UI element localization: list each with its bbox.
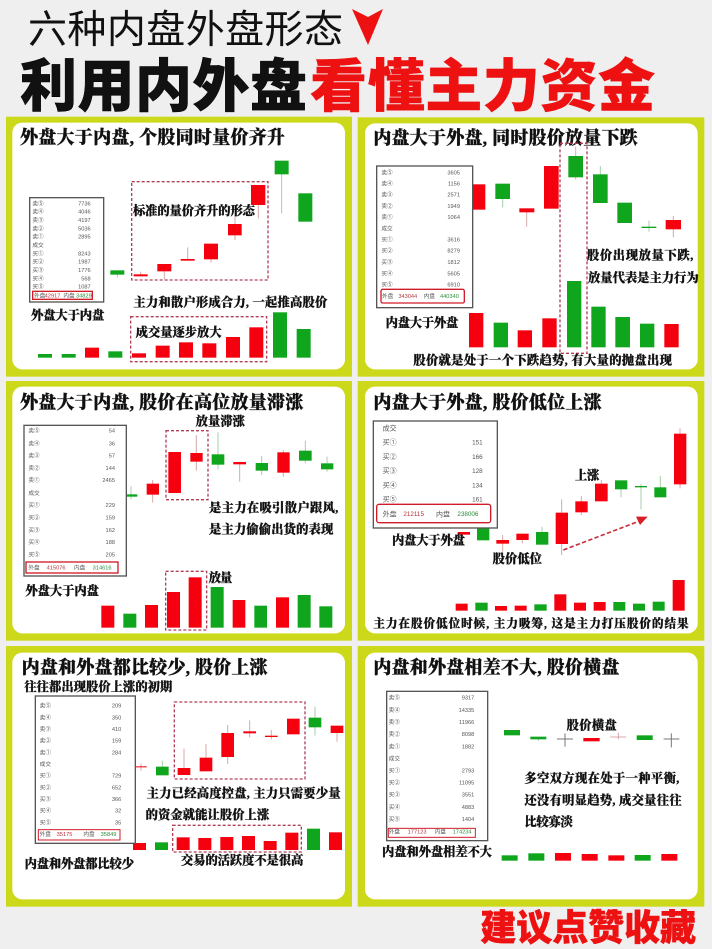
panel 5 order book table <box>35 696 135 843</box>
panel 5 volume highlight box <box>173 825 301 852</box>
panel 1 volume highlight box <box>131 317 267 362</box>
panel 1 order book table: 568 <box>81 276 91 282</box>
panel 6 order book table: 1404 <box>462 817 474 823</box>
panel 4 order book table: 166 <box>472 454 483 461</box>
panel 1 order book table: 42917 <box>45 293 60 299</box>
panel 3 order book table: 卖⑤ <box>28 427 40 435</box>
panel 6 annotation: 股价横盘: 股价横盘 <box>567 718 617 733</box>
panel 6 heading: 内盘和外盘相差不大, 股价横盘 <box>373 657 619 678</box>
panel 2 order book table: 2571 <box>447 193 460 199</box>
panel 6 order book table: 3551 <box>462 793 474 799</box>
panel 3 volume bars <box>101 577 332 628</box>
panel 3 volume highlight box <box>166 571 207 630</box>
panel 4 order book table: 成交 <box>383 423 397 432</box>
panel 2 table caption: 内盘大于外盘 <box>386 315 459 330</box>
panel 3 order book table: 卖① <box>28 476 40 484</box>
panel 1 order book table: 卖② <box>32 224 44 232</box>
panel 2 order book table: 1949 <box>447 204 460 210</box>
panel 2 order book table: 卖③ <box>381 191 393 199</box>
panel 2 order book table: 内盘 <box>424 292 435 300</box>
panel 1 price highlight box <box>132 182 268 280</box>
title line 2: 看懂主力资金 <box>310 55 655 119</box>
panel 6 order book table: 外盘 <box>389 827 400 835</box>
panel 4 order book table: 128 <box>472 468 483 475</box>
panel 5 order book table: 350 <box>112 715 121 721</box>
panel 2 order book table: 5605 <box>447 271 460 277</box>
panel 6 order book table: 买④ <box>389 803 400 811</box>
panel 6 order book table: 11966 <box>459 720 474 726</box>
panel 5 order book table: 卖④ <box>40 713 51 721</box>
panel 1 order book table: 4046 <box>78 210 91 216</box>
panel 1 order book table: 4197 <box>78 218 91 224</box>
panel 5 order book table: 159 <box>112 739 121 745</box>
panel 3 order book table: 57 <box>109 454 115 460</box>
panel 4 order book table: 151 <box>472 440 483 447</box>
panel 3 order book table: 415076 <box>47 565 66 571</box>
panel 6 candlestick chart <box>504 730 679 747</box>
panel 3 order book table: 卖② <box>28 464 40 472</box>
panel 3 order book table: 2465 <box>102 478 115 484</box>
panel 5 order book table: 652 <box>112 785 121 791</box>
panel 2 order book table <box>377 166 473 308</box>
panel 5 order book table: 买④ <box>40 807 51 815</box>
panel 5 annotation: 高度控盘 <box>146 786 341 822</box>
panel 1 order book table: 34829 <box>76 293 92 299</box>
panel 5 order book table: 卖③ <box>40 725 51 733</box>
panel 3 order book table: 外盘 <box>28 563 40 571</box>
panel 1 order book table: 成交 <box>32 241 44 249</box>
panel 1 volume bars <box>38 312 311 358</box>
panel 3 order book table: 205 <box>106 552 115 558</box>
panel 1 table caption: 外盘大于内盘 <box>31 307 105 322</box>
panel 5 candlestick chart <box>135 707 343 775</box>
panel 3 order book table: 买⑤ <box>28 550 40 558</box>
panel 1 order book table: 7736 <box>78 201 91 207</box>
panel 3: 外盘大于内盘 高位放量滞涨 <box>6 381 352 641</box>
panel 2 order book table: 1156 <box>448 181 460 187</box>
panel 1 order book table: 买② <box>32 258 44 266</box>
panel 6 order book table: 卖⑤ <box>389 694 400 702</box>
panel 4 annotation: 上涨: 上涨 <box>575 467 600 482</box>
panel 2 order book table: 买④ <box>381 269 393 277</box>
panel 6 annotation: 平衡: 多空双方现在处于一种平衡, <box>524 771 679 786</box>
title line 2: 利用内外盘 <box>20 55 307 119</box>
panel 1 order book table: 外盘 <box>34 291 46 299</box>
panel 3 order book table: 买③ <box>28 526 40 534</box>
panel 1 order book table: 内盘 <box>63 291 75 299</box>
panel 5 annotation: 活跃度: 交易的活跃度不是很高 <box>181 852 303 867</box>
panel 1 order book table: 1087 <box>78 285 91 291</box>
panel 2 order book table: 343044 <box>398 294 417 300</box>
panel 3 order book table: 买① <box>28 501 40 509</box>
panel 3 order book table: 成交 <box>28 489 40 497</box>
panel 2 highlight box <box>560 143 587 353</box>
panel 5 order book table: 35175 <box>57 832 72 838</box>
panel 1 annotation: 标准形态: 标准的量价齐升的形态 <box>133 203 257 218</box>
panel 1 order book table: 卖④ <box>32 208 44 216</box>
panel 6 order book table: 卖① <box>389 742 400 750</box>
panel 6 table caption: 内盘和外盘相差不大 <box>382 844 493 859</box>
panel 5 order book table: 内盘 <box>83 830 95 838</box>
panel 1 order book table: 卖⑤ <box>32 199 44 207</box>
panel 5 order book table: 买② <box>40 783 51 791</box>
panel 5 order book table: 卖① <box>40 748 51 756</box>
panel 3 price highlight box <box>166 431 208 500</box>
panel 1 annotation: 合力: 主力和散户形成合力, 一起推高股价 <box>133 295 328 310</box>
panel 5 table caption: 内盘和外盘都比较少 <box>25 856 136 871</box>
panel 3 order book table: 314616 <box>93 565 112 571</box>
panel 1 order book table <box>30 198 104 302</box>
panel 3 order book table <box>24 425 126 576</box>
panel 2 order book table: 3605 <box>447 170 460 176</box>
panel 4 order book table: 内盘 <box>436 509 450 518</box>
title line 1: 六种内盘外盘形态 <box>28 9 343 52</box>
panel 5 price highlight box <box>174 702 305 779</box>
panel 4 order book table: 212115 <box>403 511 424 518</box>
panel 1: 外盘大于内盘 量价齐升 <box>6 117 352 377</box>
panel 3 table caption: 外盘大于内盘 <box>25 583 100 598</box>
panel 3 order book table: 54 <box>109 429 115 435</box>
panel 6 order book table: 卖④ <box>389 706 400 714</box>
panel 2 annotation: 放量下跌: 股价出现放量下跌, <box>587 247 693 262</box>
panel 3 order book table: 买④ <box>28 538 40 546</box>
panel 4 bottom note: 主力在股价低位时候, 主力吸筹, 这是主力打压股价的结果 <box>373 616 689 630</box>
panel 3 order book table: 卖④ <box>28 439 40 447</box>
panel 5: 内盘外盘都少 股价上涨 <box>6 646 352 907</box>
panel 5 order book table: 729 <box>112 774 121 780</box>
panel 1 order book table: 买④ <box>32 274 44 282</box>
panel 2 order book table: 卖⑤ <box>381 168 393 176</box>
panel 3 candlestick chart <box>125 432 333 503</box>
panel 3 order book table: 内盘 <box>74 563 86 571</box>
panel 4 candlestick chart <box>458 428 686 555</box>
panel 6 order book table: 174234 <box>453 829 472 835</box>
panel 4 order book table <box>373 421 497 528</box>
panel 2 order book table: 买③ <box>381 258 393 266</box>
panel 4 volume bars <box>456 580 685 611</box>
panel 4: 内盘大于外盘 低位上涨 <box>358 381 704 641</box>
panel 4 order book table: 134 <box>472 482 483 489</box>
panel 4 order book table: 买④ <box>383 481 397 489</box>
panel 4 order book table: 161 <box>472 496 483 503</box>
panel 5 order book table: 外盘 <box>40 830 51 838</box>
panel 2 order book table: 买② <box>381 247 393 255</box>
panel 1 order book table: 买⑤ <box>32 283 44 291</box>
panel 2: 内盘大于外盘 放量下跌 <box>358 117 704 377</box>
panel 1 order book table: 5036 <box>78 226 91 232</box>
panel 6 order book table: 9317 <box>462 696 474 702</box>
panel 2 order book table: 买⑤ <box>381 280 393 288</box>
panel 2 bottom note: 股价就是处于一个下跌趋势, 有大量的抛盘出现 <box>413 352 673 367</box>
panel 6 order book table: 买③ <box>389 791 400 799</box>
panel 2 annotation: 放量下跌 <box>587 247 699 285</box>
panel 3 annotation: 吸引散户: 是主力偷偷出货的表现 <box>209 522 334 537</box>
panel 2 order book table: 3616 <box>447 237 460 243</box>
panel 4 annotation: 股价低位: 股价低位 <box>493 551 543 566</box>
panel 2 order book table: 卖② <box>381 202 393 210</box>
panel 1 candlestick chart <box>110 161 312 279</box>
panel 6 order book table: 卖③ <box>389 718 400 726</box>
panel 6 order book table: 买② <box>389 779 400 787</box>
panel 1 order book table: 卖③ <box>32 216 44 224</box>
panel 5 order book table: 卖② <box>40 737 51 745</box>
panel 2 order book table: 440340 <box>440 294 459 300</box>
panel 1 order book table: 1987 <box>78 260 91 266</box>
panel 2 volume bars <box>469 281 679 347</box>
panel 6 order book table: 成交 <box>389 754 400 762</box>
panel 4 order book table: 买③ <box>383 467 397 475</box>
panel 2 order book table: 外盘 <box>382 292 394 300</box>
panel 4 order book table: 买② <box>383 453 397 461</box>
panel 2 annotation: 放量下跌: 放量代表是主力行为 <box>588 270 699 285</box>
panel 1 order book table: 买① <box>32 249 44 257</box>
panel 6 order book table: 4883 <box>462 805 474 811</box>
panel 3 order book table: 159 <box>106 515 115 521</box>
panel 2 order book table: 买① <box>381 235 393 243</box>
panel 3 order book table: 188 <box>106 540 115 546</box>
panel 6 order book table: 177123 <box>408 829 427 835</box>
panel 3 order book table: 229 <box>106 503 115 509</box>
panel 3 heading: 外盘大于内盘, 股价在高位放量滞涨 <box>20 391 303 412</box>
panel 4 heading: 内盘大于外盘, 股价低位上涨 <box>373 391 602 412</box>
panel 6 order book table: 内盘 <box>435 827 446 835</box>
panel 5 heading: 内盘和外盘都比较少, 股价上涨 <box>22 657 268 678</box>
panel 6 order book table: 14335 <box>459 708 474 714</box>
panel 5 order book table: 买⑤ <box>40 818 51 826</box>
panel 5 order book table: 209 <box>112 704 121 710</box>
panel 2 order book table: 1812 <box>447 260 460 266</box>
footer call to action: 建议点赞收藏 <box>480 907 696 948</box>
panel 2 order book table: 1064 <box>447 215 460 221</box>
panel 5 order book table: 买③ <box>40 795 51 803</box>
panel 2 candlestick chart <box>471 147 681 237</box>
panel 5 order book table: 成交 <box>40 760 51 768</box>
panel 6 annotation: 平衡 <box>524 771 682 829</box>
panel 1 order book table: 2895 <box>78 235 91 241</box>
panel 5 volume bars <box>133 829 342 850</box>
panel 6: 内外盘相差不大 股价横盘 <box>358 646 704 948</box>
panel 1 annotation: 成交量: 成交量逐步放大 <box>136 325 222 340</box>
panel 1 order book table: 8243 <box>78 251 91 257</box>
panel 3 order book table: 买② <box>28 513 40 521</box>
panel 6 order book table: 2793 <box>462 769 474 775</box>
panel 6 order book table: 1882 <box>462 744 474 750</box>
panel 2 order book table: 卖① <box>381 213 393 221</box>
panel 3 order book table: 卖③ <box>28 452 40 460</box>
panel 6 order book table: 买⑤ <box>389 815 400 823</box>
panel 2 order book table: 6910 <box>447 282 460 288</box>
panel 5 annotation: 高度控盘: 主力已经高度控盘, 主力只需要少量 <box>147 786 341 801</box>
panel 1 heading: 外盘大于内盘, 个股同时量价齐升 <box>20 127 285 148</box>
panel 2 order book table: 8279 <box>447 249 460 255</box>
panel 4 table caption: 内盘大于外盘 <box>392 533 466 548</box>
panel 5 order book table: 410 <box>112 727 121 733</box>
panel 6 annotation: 平衡: 比较寡淡 <box>524 814 574 829</box>
icon: red down triangle <box>352 9 383 45</box>
panel 4 order book table: 外盘 <box>383 509 397 518</box>
panel 2 heading: 内盘大于外盘, 同时股价放量下跌 <box>373 127 638 148</box>
arrow: dashed uptrend <box>563 517 648 550</box>
panel 6 order book table: 8098 <box>462 732 474 738</box>
panel 5 order book table: 32 <box>115 809 121 815</box>
panel 3 order book table: 162 <box>106 528 115 534</box>
panel 6 annotation: 平衡: 还没有明显趋势, 成交量往往 <box>524 792 682 807</box>
panel 2 order book table: 成交 <box>381 224 393 232</box>
panel 3 order book table: 144 <box>106 466 115 472</box>
panel 6 order book table: 买① <box>389 767 400 775</box>
panel 5 order book table: 35 <box>115 820 121 826</box>
panel 3 annotation: 吸引散户: 是主力在吸引散户跟风, <box>209 500 338 515</box>
panel 4 order book table: 238006 <box>457 511 479 518</box>
panel 6 order book table: 卖② <box>389 730 400 738</box>
panel 6 order book table: 11095 <box>459 781 474 787</box>
panel 3 annotation: 放量滞涨: 放量滞涨 <box>196 414 246 429</box>
panel 1 order book table: 1776 <box>78 268 91 274</box>
panel 1 order book table: 买③ <box>32 266 44 274</box>
panel 5 order book table: 卖⑤ <box>40 702 51 710</box>
panel 6 order book table <box>387 691 488 841</box>
panel 2 order book table: 卖④ <box>381 179 393 187</box>
panel 5 order book table: 买① <box>40 772 51 780</box>
panel 5 order book table: 366 <box>112 797 121 803</box>
panel 3 annotation: 放量: 放量 <box>209 570 232 585</box>
panel 6 volume bars <box>502 853 677 861</box>
title line 2 <box>20 55 655 119</box>
panel 5 annotation: 高度控盘: 的资金就能让股价上涨 <box>146 807 270 822</box>
panel 4 order book table: 买⑤ <box>383 495 397 503</box>
panel 4 order book table: 买① <box>383 439 397 447</box>
panel 5 order book table: 35849 <box>101 832 116 838</box>
panel 5 subheading: 往往都出现股价上涨的初期 <box>24 679 173 694</box>
panel 3 annotation: 吸引散户 <box>209 500 338 537</box>
panel 3 order book table: 36 <box>109 441 115 447</box>
panel 1 order book table: 卖① <box>32 233 44 241</box>
panel 5 order book table: 284 <box>112 750 121 756</box>
